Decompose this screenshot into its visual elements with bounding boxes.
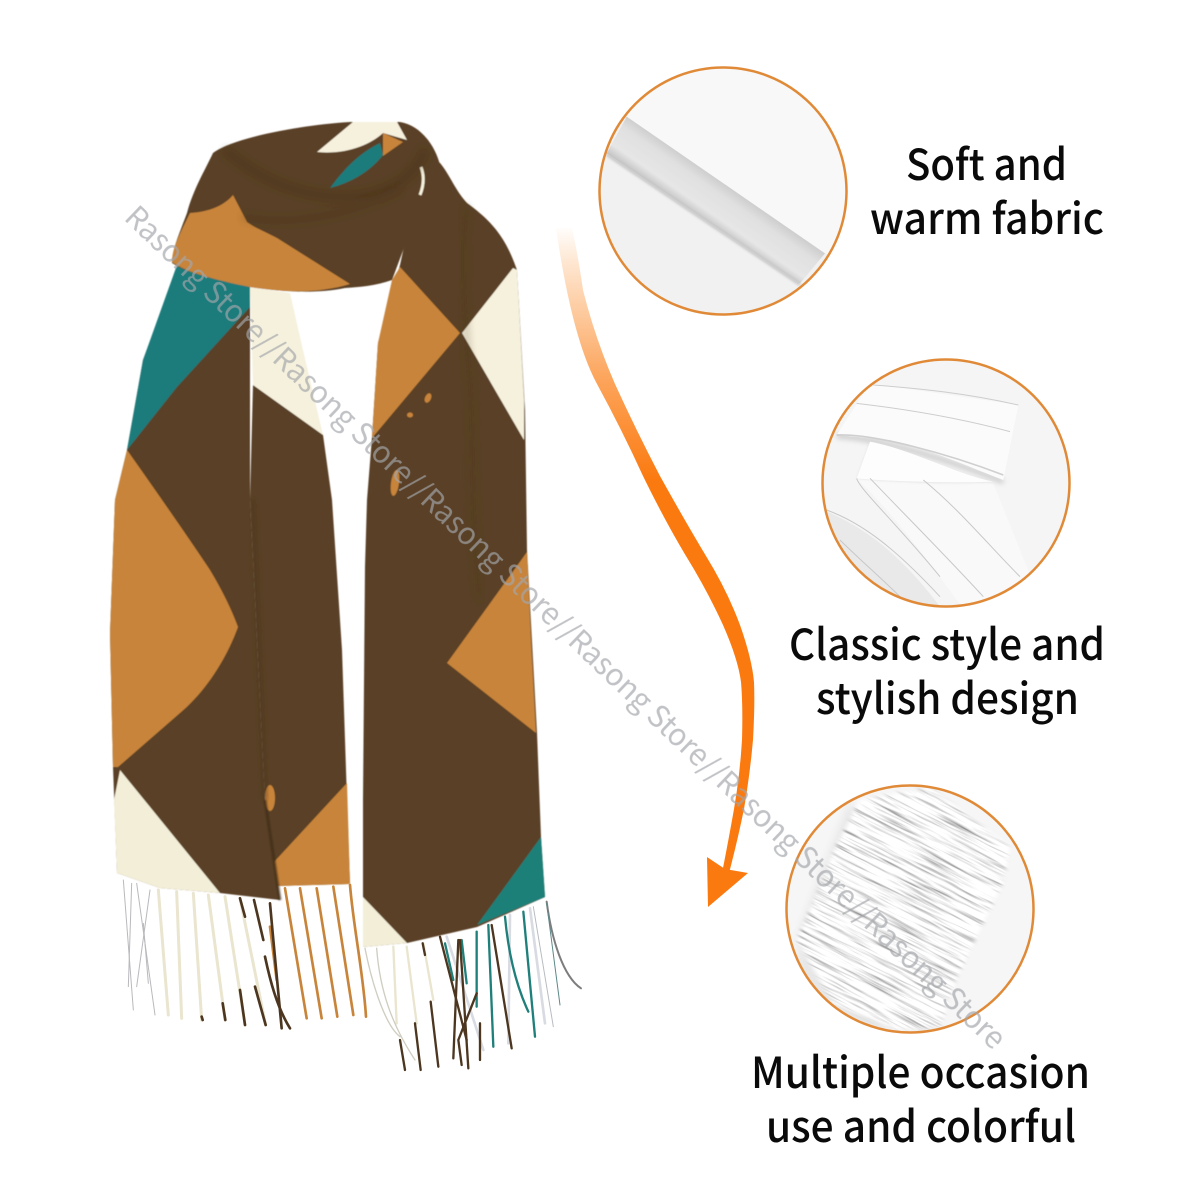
label: classic style and stylish design (789, 611, 1105, 727)
panel: multiple occasion detail (785, 784, 1035, 1034)
detail photo: white fringe (788, 787, 1032, 1031)
watermark: Rasong Store//Rasong Store//Rasong Store//Rasong Store//Rasong Store//Rasong Store (117, 194, 1018, 1057)
label: soft and warm fabric: warm fabric (870, 185, 1104, 247)
arrow: head (707, 857, 748, 907)
scarf: right tail (363, 150, 545, 947)
label: multiple occasion use and colorful: use and colorful (766, 1093, 1076, 1155)
curved orange arrow (556, 228, 754, 907)
label: classic style and stylish design: stylish design (816, 665, 1079, 727)
panel: soft fabric detail (598, 66, 848, 316)
detail ring (822, 360, 1070, 606)
detail photo: pleated folds (824, 361, 1068, 605)
scarf illustration (110, 122, 581, 1070)
scarf: small print spots (389, 392, 433, 496)
label: multiple occasion use and colorful (751, 1039, 1090, 1155)
detail ring (600, 68, 846, 314)
scarf: neck wrap (172, 122, 440, 292)
label: classic style and stylish design: Classic style and (789, 611, 1105, 673)
fringe: right tail (365, 902, 581, 1070)
detail ring (786, 786, 1034, 1032)
label: multiple occasion use and colorful: Multiple occasion (751, 1039, 1090, 1101)
label: soft and warm fabric (870, 131, 1104, 247)
fringe: left tail (123, 880, 366, 1028)
label: soft and warm fabric: Soft and (906, 131, 1067, 193)
panel: classic style detail (813, 355, 1075, 613)
arrow: shaft (556, 228, 754, 873)
scarf: outer left tail (110, 265, 280, 900)
scarf: inner left panel (250, 287, 350, 886)
detail photo: smooth fabric fold (601, 116, 828, 313)
scarf: cloth body (110, 122, 545, 947)
